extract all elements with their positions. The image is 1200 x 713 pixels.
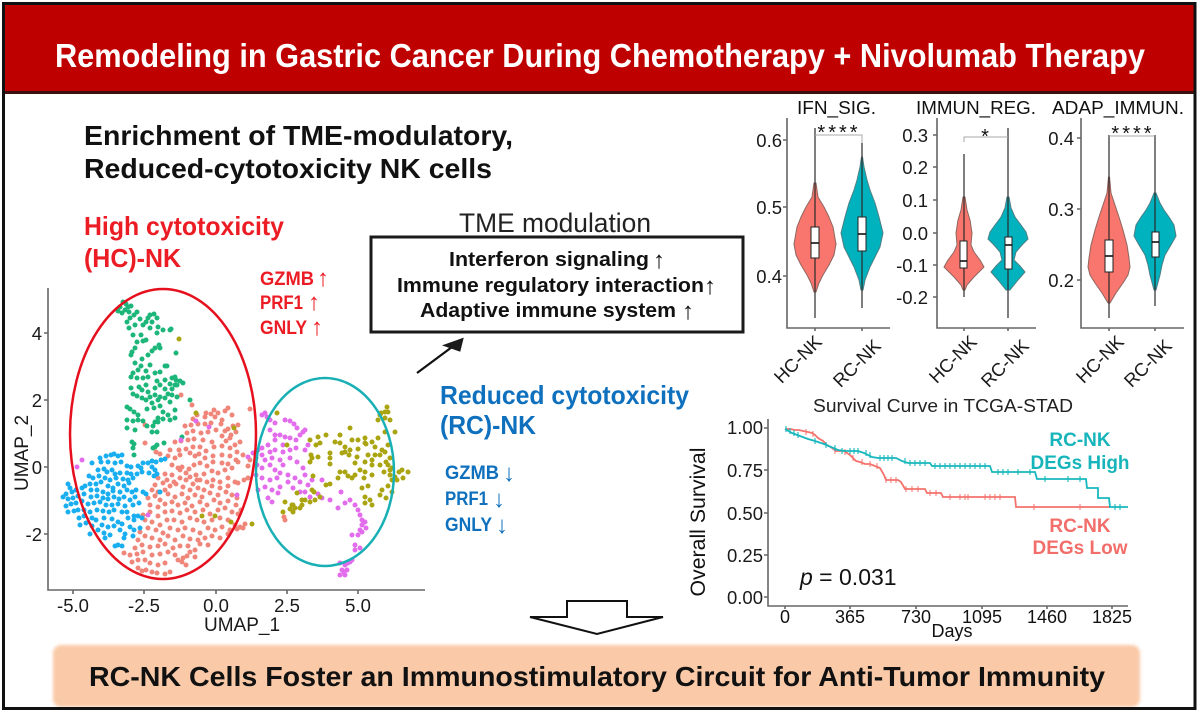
- censor marks: DEGs low: [806, 429, 1080, 510]
- gene list: RC down: PRF1: [445, 489, 488, 510]
- UMAP axes: [12, 288, 425, 636]
- box: TME modulation pathways: Adaptive immune system: [420, 300, 676, 322]
- violin panel: IMMUN_REG: -0.2: [896, 287, 928, 308]
- UMAP axes: UMAP_2: [12, 415, 33, 491]
- violin panel: IMMUN_REG: RC-NK: [977, 335, 1033, 391]
- gene list: RC down: GZMB: [445, 463, 499, 484]
- violin panel: IFN_SIG: RC-NK: [829, 335, 885, 391]
- UMAP axes: -2.5: [128, 595, 160, 616]
- heading: enrichment: Reduced-cytotoxicity NK cells: [84, 153, 492, 184]
- gene list: HC up: PRF1: [260, 293, 303, 314]
- gene list: RC down: [445, 460, 515, 539]
- survival axes: 1.00: [727, 417, 763, 438]
- violin panel: IMMUN_REG: 0.3: [902, 125, 928, 146]
- gene list: HC up: ↑: [311, 314, 323, 341]
- UMAP axes: 0.0: [203, 595, 229, 616]
- survival axes: 0.75: [727, 460, 763, 481]
- violin panel: IMMUN_REG: 0.0: [902, 223, 928, 244]
- legend: DEGs high: RC-NK: [1049, 430, 1111, 451]
- label: high cytotoxicity: (HC)-NK: [84, 243, 181, 273]
- gene list: RC down: ↓: [496, 512, 508, 539]
- UMAP axes: -2: [26, 524, 42, 545]
- violin panel: ADAP_IMMUN: 0.4: [1048, 128, 1074, 149]
- heading: enrichment: [84, 120, 513, 184]
- violin panel: ADAP_IMMUN: ADAP_IMMUN.: [1052, 98, 1184, 119]
- legend: DEGs low: RC-NK: [1049, 516, 1111, 537]
- violin panel: ADAP_IMMUN: 0.3: [1048, 199, 1074, 220]
- conclusion banner: [53, 645, 1140, 707]
- violin panel: ADAP_IMMUN: 0.2: [1048, 270, 1074, 291]
- violin panel: IMMUN_REG: HC-NK: [925, 331, 981, 387]
- conclusion banner: RC-NK Cells Foster an Immunostimulatory Circuit for Anti-Tumor Immunity: [89, 661, 1105, 692]
- blue cluster: [63, 454, 165, 546]
- survival title: Survival Curve in TCGA-STAD: [813, 396, 1073, 416]
- violin panel: IFN_SIG: [756, 98, 890, 391]
- violin panel: IFN_SIG: ****: [817, 122, 861, 144]
- UMAP scatter plot: [12, 288, 425, 636]
- violin panel: IFN_SIG: 0.6: [756, 130, 782, 151]
- box: TME modulation pathways: ↑: [653, 247, 665, 274]
- ellipse: HC-NK region: [70, 289, 256, 579]
- violin panel: ADAP_IMMUN: HC-NK: [1072, 331, 1128, 387]
- survival axes: 0.00: [727, 587, 763, 608]
- heading: enrichment: Enrichment of TME-modulatory,: [84, 120, 513, 151]
- violin panel: IFN_SIG: IFN_SIG.: [797, 98, 876, 119]
- violin panel: ADAP_IMMUN: [1048, 98, 1184, 391]
- gene list: RC down: ↓: [503, 460, 515, 487]
- legend: DEGs low: [1032, 516, 1128, 559]
- p value: p = 0.031: [799, 564, 897, 590]
- survival axes: 365: [835, 607, 865, 627]
- UMAP axes: 5.0: [345, 595, 371, 616]
- UMAP axes: -5.0: [57, 595, 89, 616]
- survival chart: [686, 396, 1132, 641]
- violin panel: IMMUN_REG: *: [981, 126, 989, 148]
- survival axes: 0: [780, 607, 790, 627]
- legend: DEGs high: [1030, 430, 1130, 474]
- salmon cluster: [124, 395, 285, 574]
- gene list: HC up: ↑: [308, 289, 320, 316]
- violin panel: IFN_SIG: 0.5: [756, 197, 782, 218]
- violin panel: IMMUN_REG: IMMUN_REG.: [916, 98, 1036, 119]
- violin panel: IFN_SIG: 0.4: [756, 266, 782, 287]
- label: reduced cytotoxicity: (RC)-NK: [440, 410, 536, 440]
- label: high cytotoxicity: [84, 211, 285, 273]
- box: TME modulation pathways: Interferon signaling: [449, 249, 649, 271]
- violin panel: ADAP_IMMUN: RC-NK: [1120, 335, 1176, 391]
- label: TME modulation: TME modulation: [459, 208, 651, 238]
- survival axes: 1095: [962, 607, 1002, 627]
- magenta cluster: [77, 413, 366, 575]
- gene list: HC up: GNLY: [260, 318, 307, 339]
- violin panel: ADAP_IMMUN: ****: [1111, 123, 1155, 145]
- UMAP axes: 2.5: [274, 595, 300, 616]
- gene list: RC down: GNLY: [445, 515, 492, 536]
- curve: RC-NK DEGs low: [785, 429, 1110, 507]
- gene list: HC up: [260, 265, 329, 341]
- box: TME modulation pathways: ↑: [682, 298, 694, 325]
- UMAP axes: UMAP_1: [204, 615, 280, 636]
- legend: DEGs low: DEGs Low: [1032, 538, 1128, 559]
- violin panel: IFN_SIG: HC-NK: [770, 331, 826, 387]
- arrow: scatter to TME modulation: [417, 338, 464, 373]
- violin panel: IMMUN_REG: 0.1: [902, 190, 928, 211]
- gene list: RC down: ↓: [493, 486, 505, 513]
- curve: RC-NK DEGs high: [785, 429, 1128, 507]
- UMAP axes: 0: [32, 457, 42, 478]
- censor marks: DEGs high: [786, 426, 1120, 510]
- survival axes: 0.25: [727, 545, 763, 566]
- gene list: HC up: ↑: [317, 265, 329, 292]
- box: TME modulation pathways: [371, 237, 743, 332]
- box: TME modulation pathways: Immune regulatory interaction: [397, 275, 704, 297]
- violin panel: IMMUN_REG: -0.1: [896, 255, 928, 276]
- violin panel: IMMUN_REG: [896, 98, 1036, 391]
- ellipse: RC-NK region: [256, 378, 394, 566]
- legend: DEGs high: DEGs High: [1030, 453, 1130, 474]
- olive cluster: [179, 339, 408, 524]
- label: high cytotoxicity: High cytotoxicity: [84, 211, 285, 241]
- box: TME modulation pathways: ↑: [704, 273, 716, 300]
- survival axes: Overall Survival: [686, 448, 710, 596]
- gene list: HC up: GZMB: [260, 269, 314, 290]
- survival axes: 0.50: [727, 503, 763, 524]
- survival axes: 1825: [1092, 607, 1132, 627]
- green cluster: [118, 302, 190, 455]
- survival axes: [686, 417, 1132, 641]
- arrow: big down arrow: [530, 601, 663, 634]
- title banner: [5, 5, 1194, 94]
- survival axes: 730: [901, 607, 931, 627]
- survival axes: Days: [931, 621, 973, 641]
- violin panel: IMMUN_REG: 0.2: [902, 157, 928, 178]
- UMAP axes: 4: [32, 323, 42, 344]
- label: reduced cytotoxicity: Reduced cytotoxicity: [440, 380, 690, 410]
- label: reduced cytotoxicity: [440, 380, 690, 440]
- title banner: Remodeling in Gastric Cancer During Chemotherapy + Nivolumab Therapy: [55, 37, 1146, 74]
- survival axes: 1460: [1027, 607, 1067, 627]
- UMAP axes: 2: [32, 390, 42, 411]
